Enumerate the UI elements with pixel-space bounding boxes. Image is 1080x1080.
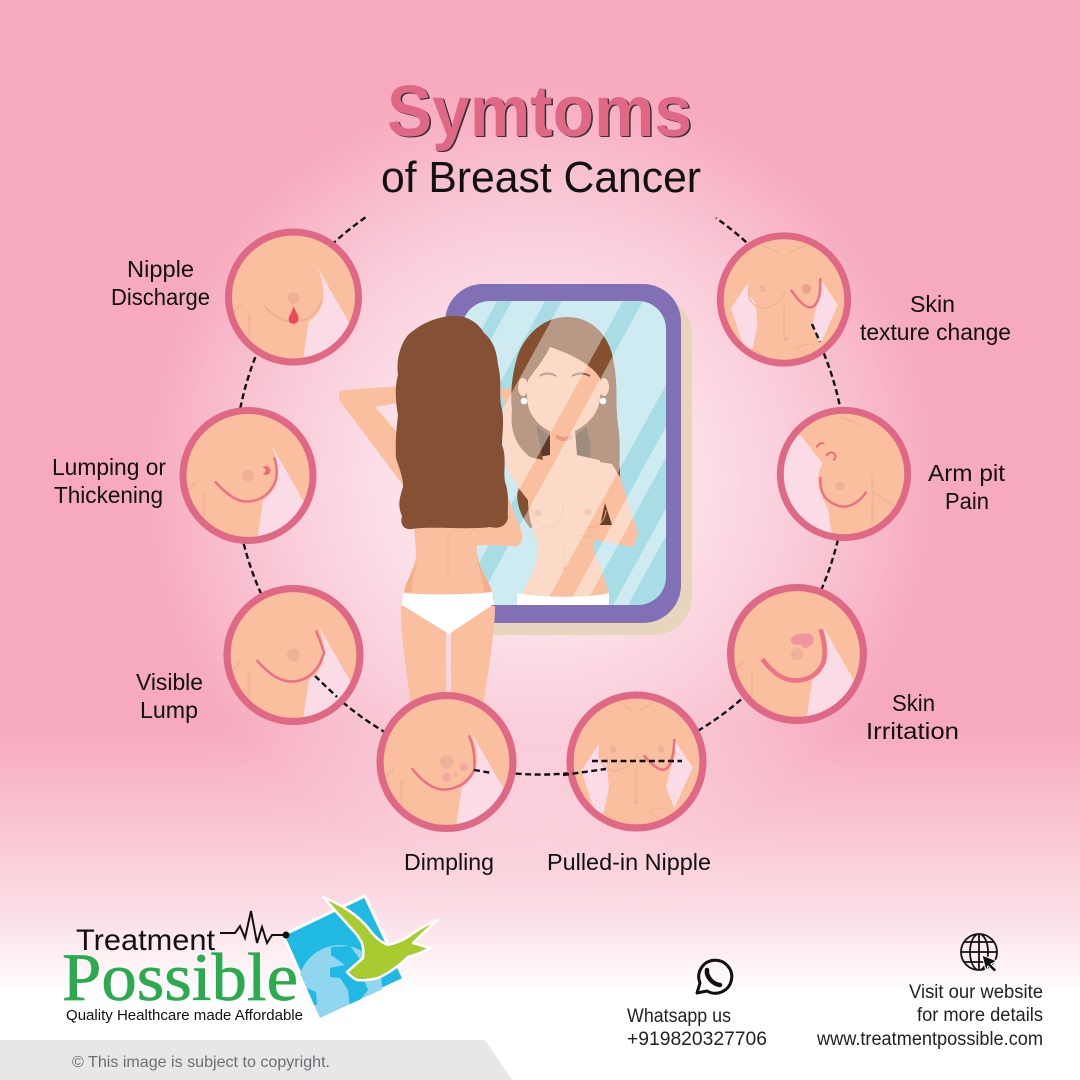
label: lumping or thickening (52, 454, 166, 508)
mirror glass and reflection (464, 301, 666, 605)
woman seen from behind (339, 316, 522, 705)
logo pulse line (220, 911, 290, 943)
dashed connector segments over circles (315, 324, 820, 775)
title: Symtoms (388, 73, 694, 153)
globe cursor icon (961, 934, 997, 972)
hair (396, 316, 508, 529)
copyright band: © This image is subject to copyright. (72, 1054, 330, 1071)
whatsapp text (627, 1006, 767, 1050)
label: skin texture change (860, 291, 1011, 345)
label: visible lump (136, 669, 203, 723)
circle: pulled-in nipple (570, 695, 703, 828)
copyright band (0, 1040, 512, 1080)
raised arm (339, 386, 402, 484)
torso and bent arm (403, 490, 522, 600)
label: arm pit pain: Pain (945, 488, 989, 514)
label: arm pit pain (928, 460, 1006, 514)
label: pulled-in nipple: Pulled-in Nipple (547, 849, 711, 875)
whatsapp text: Whatsapp us (627, 1006, 731, 1027)
whatsapp text: +919820327706 (627, 1029, 767, 1050)
title: of Breast Cancer (381, 153, 701, 202)
whatsapp icon (697, 960, 732, 993)
circle: skin texture change (720, 236, 848, 363)
logo wordmark: Treatment (76, 924, 216, 957)
website text: for more details (917, 1005, 1043, 1026)
label: skin texture change: Skin (910, 291, 955, 317)
label: arm pit pain: Arm pit (928, 460, 1006, 486)
logo wordmark: Quality Healthcare made Affordable (66, 1007, 303, 1024)
website text: Visit our website (909, 982, 1043, 1003)
dashed connector ring (234, 217, 846, 775)
title: Symtoms (387, 72, 692, 152)
circle: lumping or thickening (183, 410, 313, 542)
label: lumping or thickening: Thickening (54, 482, 163, 508)
label: lumping or thickening: Lumping or (52, 454, 166, 480)
circle: dimpling (380, 696, 513, 829)
label: skin texture change: texture change (860, 319, 1011, 345)
logo (62, 896, 438, 1029)
logo card with globe (283, 896, 404, 1029)
label: visible lump: Lump (140, 697, 198, 723)
circle: nipple discharge (228, 232, 358, 363)
legs (401, 606, 495, 705)
logo bird (323, 897, 438, 980)
label: nipple discharge: Discharge (111, 284, 210, 310)
glass light bands (464, 301, 666, 605)
circle: visible lump (227, 589, 360, 722)
label: skin irritation: Skin (892, 690, 935, 716)
label: dimpling: Dimpling (404, 849, 494, 875)
label: nipple discharge: Nipple (127, 256, 194, 282)
website text (816, 982, 1043, 1050)
title (381, 72, 701, 202)
website text: www.treatmentpossible.com (816, 1029, 1043, 1050)
logo wordmark: Possible (62, 939, 298, 1015)
circle: skin irritation (731, 588, 863, 721)
underwear (402, 592, 494, 634)
circle: arm pit pain (775, 410, 908, 539)
label: skin irritation (866, 690, 959, 744)
label: skin irritation: Irritation (866, 718, 959, 744)
label: visible lump: Visible (136, 669, 203, 695)
label: nipple discharge (111, 256, 210, 310)
mirror (445, 284, 692, 635)
